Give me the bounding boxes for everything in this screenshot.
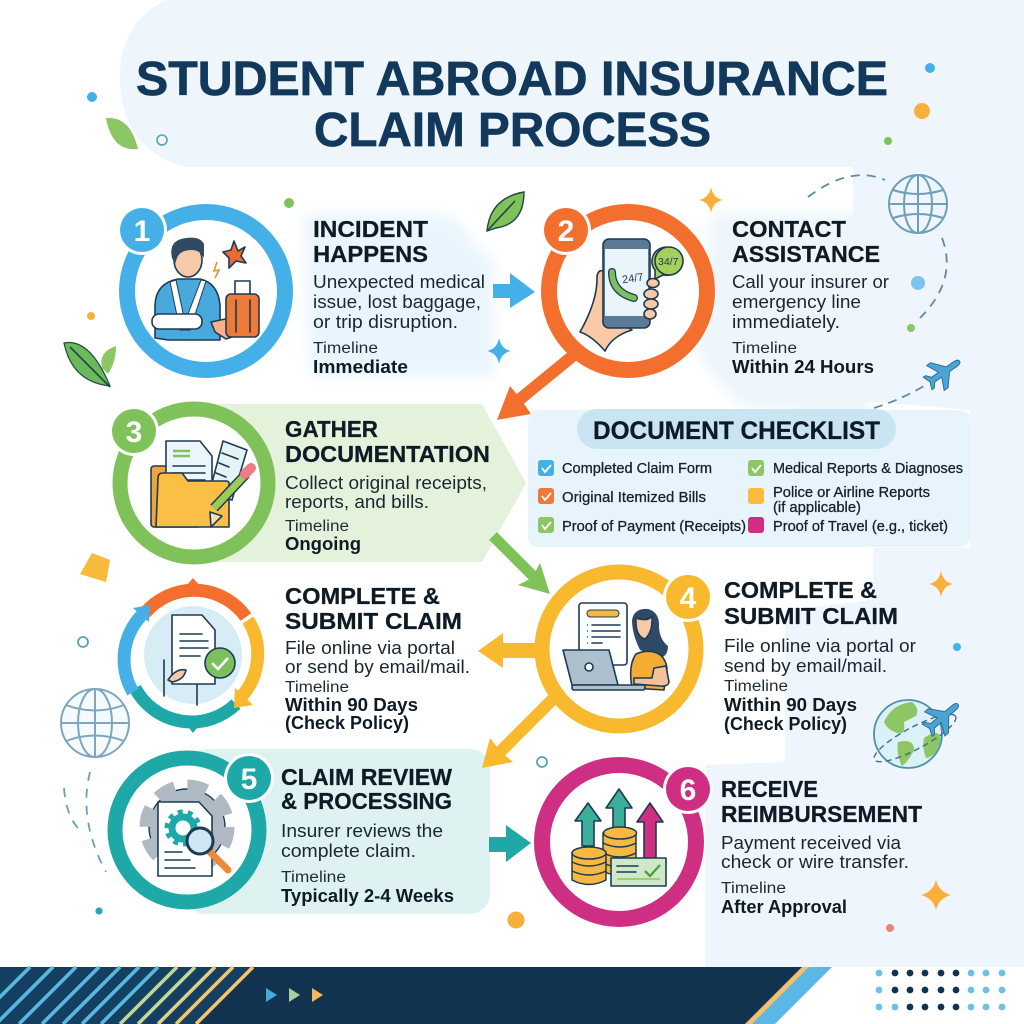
title [136, 53, 888, 157]
dashed flight path to plane [874, 386, 924, 408]
step 1 text: issue, lost baggage, [313, 292, 481, 312]
submit claim text left: Timeline [285, 679, 349, 696]
step 3 [109, 406, 268, 557]
step 5 text: complete claim. [281, 841, 416, 861]
icon: phone 24/7: 34/7 [658, 256, 679, 268]
step 3 text [285, 416, 490, 554]
badge 3 [109, 406, 159, 456]
step 2 text: ASSISTANCE [732, 241, 880, 267]
badge 1: 1 [134, 215, 150, 248]
step 5 text: Timeline [281, 869, 346, 886]
step 6 text: Payment received via [721, 833, 902, 853]
checklist items: Original Itemized Bills [562, 490, 706, 506]
checklist items [562, 461, 963, 535]
arrow: step 4 to 5 [482, 695, 557, 768]
arrow: step 2 to 3 [497, 350, 580, 420]
submit claim text left: Within 90 Days [285, 695, 418, 715]
icon: leaves [64, 118, 524, 387]
step 5 text: & PROCESSING [281, 788, 452, 814]
badge 4: 4 [680, 582, 697, 615]
icon: globe with plane [869, 692, 968, 769]
step 2 text: emergency line [732, 292, 861, 312]
step 6 text [721, 776, 922, 917]
dashed curves left [64, 772, 106, 872]
title: CLAIM PROCESS [314, 104, 711, 157]
icon: coins and arrows [572, 789, 666, 886]
step 4 text: COMPLETE & [724, 577, 877, 603]
step 3 text: Ongoing [285, 534, 361, 554]
step 5 text [281, 764, 454, 906]
step 2 text: Within 24 Hours [732, 357, 874, 377]
step 3 text: Timeline [285, 518, 349, 535]
icon: globe left [61, 689, 129, 757]
title: STUDENT ABROAD INSURANCE [136, 53, 888, 106]
step 1 text: or trip disruption. [313, 312, 458, 332]
step 4 text: File online via portal or [724, 636, 916, 656]
step 2 text: CONTACT [732, 216, 846, 242]
checklist checkboxes [538, 460, 764, 533]
icon: plane [919, 349, 968, 396]
step 5 text: Insurer reviews the [281, 821, 443, 841]
badge 6: 6 [680, 774, 696, 807]
submit claim text left: (Check Policy) [285, 713, 409, 733]
badge 2 [541, 205, 591, 255]
panel: incident background [305, 214, 494, 376]
icon: document with check [164, 615, 235, 705]
step 6 [542, 764, 713, 919]
badge 4 [663, 572, 713, 622]
checklist items: Proof of Payment (Receipts) [562, 519, 746, 535]
step 4 text: send by email/mail. [724, 656, 887, 676]
checklist items: (if applicable) [773, 500, 861, 516]
step 2 text [732, 216, 889, 377]
dot grid [876, 970, 1005, 1010]
badge 5: 5 [241, 763, 257, 796]
step 5 text: Typically 2-4 Weeks [281, 886, 454, 906]
icon: injured student [152, 238, 259, 340]
arrow: step 3 to 4 [493, 536, 550, 594]
arrow: step 5 to 6 [489, 825, 531, 862]
submit claim text left: COMPLETE & [285, 583, 440, 609]
step 4 text: Within 90 Days [724, 695, 857, 715]
step 1 [117, 205, 285, 370]
step 5 [115, 753, 274, 902]
step 6 text: check or wire transfer. [721, 852, 909, 872]
icon: gear and magnifier [145, 785, 229, 876]
step 1 text: INCIDENT [313, 216, 428, 242]
step 2 text: immediately. [732, 312, 840, 332]
step 6 text: After Approval [721, 897, 847, 917]
step 4 [542, 572, 713, 726]
icon: globe top right [889, 175, 947, 233]
submit claim text left: File online via portal [285, 638, 455, 658]
step 6 text: Timeline [721, 880, 786, 897]
submit claim text left: SUBMIT CLAIM [285, 608, 462, 634]
step 1 text: Timeline [313, 340, 378, 357]
icon: tag [80, 553, 110, 582]
icon: person at laptop [563, 603, 669, 690]
icon: folder with documents [151, 441, 251, 527]
step 1 text: Unexpected medical [313, 272, 485, 292]
badge 2: 2 [558, 215, 574, 248]
panel: document checklist [528, 409, 970, 547]
step 2 text: Timeline [732, 340, 797, 357]
step 4 text: (Check Policy) [724, 714, 847, 734]
badge 1 [117, 205, 167, 255]
checklist items: Completed Claim Form [562, 461, 712, 477]
checklist items: Police or Airline Reports [773, 485, 930, 501]
step 4 text: SUBMIT CLAIM [724, 603, 898, 629]
step 6 text: RECEIVE [721, 776, 818, 802]
arrow: step 1 to 2 [493, 273, 535, 308]
badge 5 [224, 753, 274, 803]
checklist items: Medical Reports & Diagnoses [773, 461, 963, 477]
step 6 text: REIMBURSEMENT [721, 801, 922, 827]
step 4 text [724, 577, 916, 734]
step 5 text: CLAIM REVIEW [281, 764, 452, 790]
step 2 [541, 205, 707, 370]
step 1 text: HAPPENS [313, 241, 428, 267]
footer band [0, 967, 832, 1024]
step 3 text: reports, and bills. [285, 492, 429, 512]
submit claim text left: or send by email/mail. [285, 657, 470, 677]
panel: gather documentation [190, 404, 526, 562]
step 4 text: Timeline [724, 678, 788, 695]
panel: claim review [185, 749, 490, 914]
step 3 text: DOCUMENTATION [285, 441, 490, 467]
icon: phone 24/7: 24/7 [621, 271, 644, 286]
badge 3: 3 [126, 416, 142, 449]
step 1 text [313, 216, 485, 377]
icon: phone 24/7 [580, 239, 683, 351]
submit claim text left [285, 583, 470, 733]
decorative dots and sparkles [78, 63, 961, 932]
submit cycle ring [124, 578, 258, 733]
step 3 text: GATHER [285, 416, 378, 442]
arrow: step 4 left [478, 633, 538, 668]
badge 6 [663, 764, 713, 814]
checklist items: Proof of Travel (e.g., ticket) [773, 519, 948, 535]
step 2 text: Call your insurer or [732, 272, 889, 292]
step 1 text: Immediate [313, 357, 408, 377]
checklist heading [577, 409, 896, 449]
checklist heading: DOCUMENT CHECKLIST [593, 417, 880, 445]
dashed flight path top right [808, 175, 947, 318]
step 3 text: Collect original receipts, [285, 473, 487, 493]
